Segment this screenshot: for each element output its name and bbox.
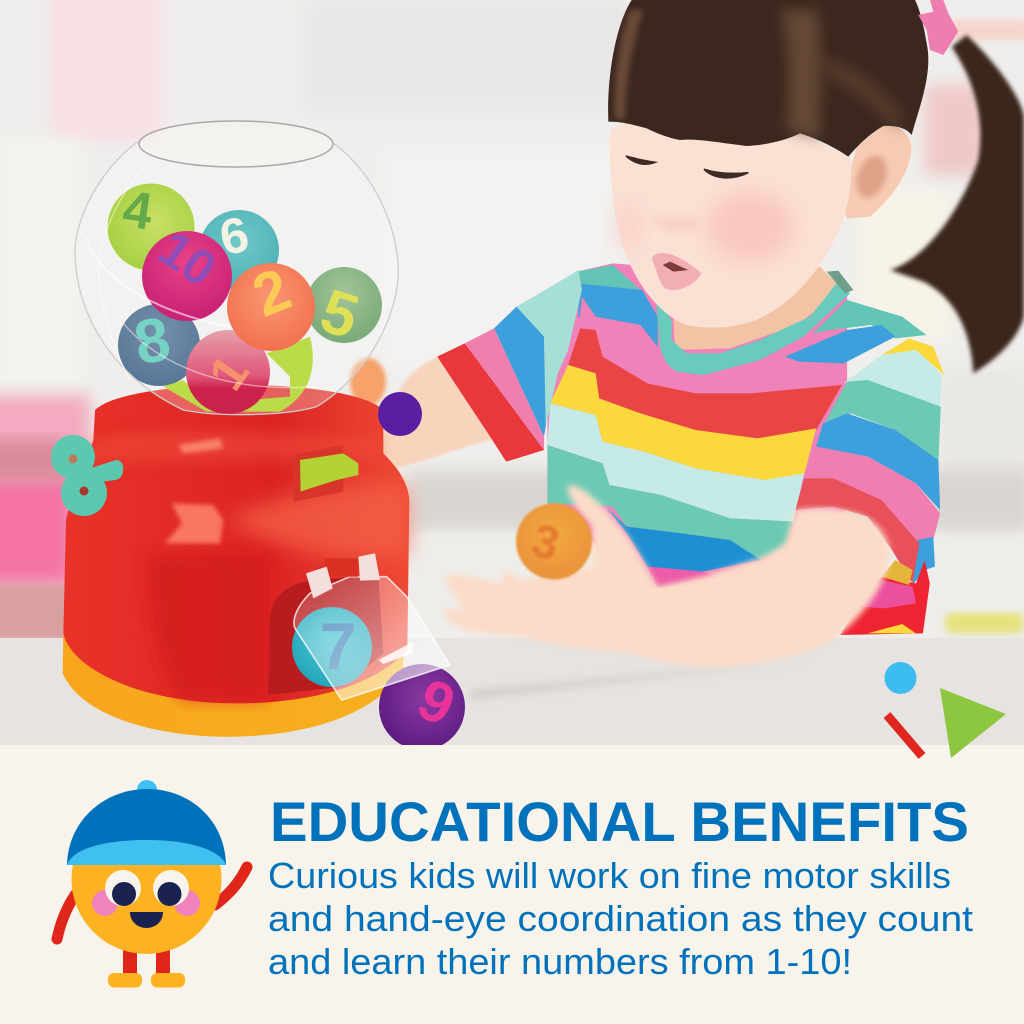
body shading xyxy=(87,431,408,700)
body text: and hand-eye coordination as they count xyxy=(268,898,973,939)
ball 7: 7 xyxy=(320,609,356,683)
left eye lashes xyxy=(626,156,655,164)
hat xyxy=(67,789,226,865)
girl xyxy=(382,0,1024,667)
globe fill xyxy=(75,142,398,415)
gumball machine toy xyxy=(51,121,465,750)
heading: EDUCATIONAL BENEFITS xyxy=(270,790,969,853)
cheek blush xyxy=(707,192,793,262)
ball 6: 6 xyxy=(215,206,254,266)
hair tie xyxy=(918,0,958,55)
body text: Curious kids will work on fine motor skills xyxy=(268,855,951,896)
ball 10 xyxy=(142,220,232,321)
photo background: playroom xyxy=(0,0,1024,745)
blue circle xyxy=(884,662,916,694)
left sleeve bands xyxy=(437,270,582,462)
bottom panel xyxy=(0,745,1024,1024)
mascot xyxy=(57,780,247,988)
ball 8 xyxy=(118,304,200,386)
wind-up key xyxy=(51,435,123,516)
pompom xyxy=(137,780,157,800)
far arm xyxy=(382,345,520,470)
face xyxy=(610,123,851,328)
lips xyxy=(652,253,702,290)
lever slot xyxy=(293,445,358,502)
arms xyxy=(57,867,247,939)
back collar xyxy=(827,271,853,293)
torso colour bands xyxy=(547,263,847,588)
yellow base xyxy=(63,627,403,737)
orange ball xyxy=(516,504,592,580)
nose highlight xyxy=(650,215,698,233)
right sleeve bands xyxy=(785,300,944,585)
body text xyxy=(268,855,973,982)
red body xyxy=(63,385,409,703)
red bar xyxy=(887,715,922,756)
cheeks xyxy=(92,890,200,916)
feet xyxy=(108,973,185,988)
lime strip xyxy=(163,337,313,412)
ball 2: 2 xyxy=(244,255,300,330)
body text: and learn their numbers from 1-10! xyxy=(268,941,852,982)
ball 1: 1 xyxy=(198,345,260,400)
cheek blush left xyxy=(613,203,640,250)
ball 4: 4 xyxy=(119,180,156,242)
decorative shapes xyxy=(884,662,1006,758)
ball 1 xyxy=(186,330,270,414)
ball 6 xyxy=(199,206,279,290)
shirt below arm xyxy=(840,560,930,635)
eyes xyxy=(105,870,189,906)
hair xyxy=(608,0,928,157)
exit door xyxy=(268,575,383,695)
ponytail xyxy=(890,35,1024,373)
ball 5: 5 xyxy=(312,276,367,353)
purple knob xyxy=(378,392,422,436)
right eye lashes xyxy=(704,169,748,178)
table surface xyxy=(0,613,1024,745)
head xyxy=(72,804,222,954)
globe outline and swirl xyxy=(75,142,398,415)
ball 4 xyxy=(108,180,194,270)
ball 10: 10 xyxy=(149,220,226,298)
ear xyxy=(842,125,912,218)
shirt xyxy=(437,263,944,635)
ball 5 xyxy=(306,267,382,353)
legs xyxy=(123,945,170,977)
green triangle xyxy=(940,688,1006,758)
mouth xyxy=(130,912,163,928)
globe rim xyxy=(139,121,333,167)
ear inner xyxy=(851,152,892,202)
ball 9 xyxy=(379,664,465,750)
ball 8: 8 xyxy=(129,305,175,378)
hat band xyxy=(67,840,226,865)
ball 2 xyxy=(227,255,315,351)
collar xyxy=(656,283,850,375)
clear flap xyxy=(294,553,450,700)
ball 7 xyxy=(292,607,372,687)
mouth opening xyxy=(663,262,688,272)
orange ball: 3 xyxy=(527,514,565,570)
near arm and hand xyxy=(444,485,890,667)
ball 9: 9 xyxy=(408,666,465,739)
glass globe xyxy=(75,121,398,415)
orange ball behind globe xyxy=(350,358,386,406)
neck and head xyxy=(608,0,958,375)
neck xyxy=(673,267,843,350)
